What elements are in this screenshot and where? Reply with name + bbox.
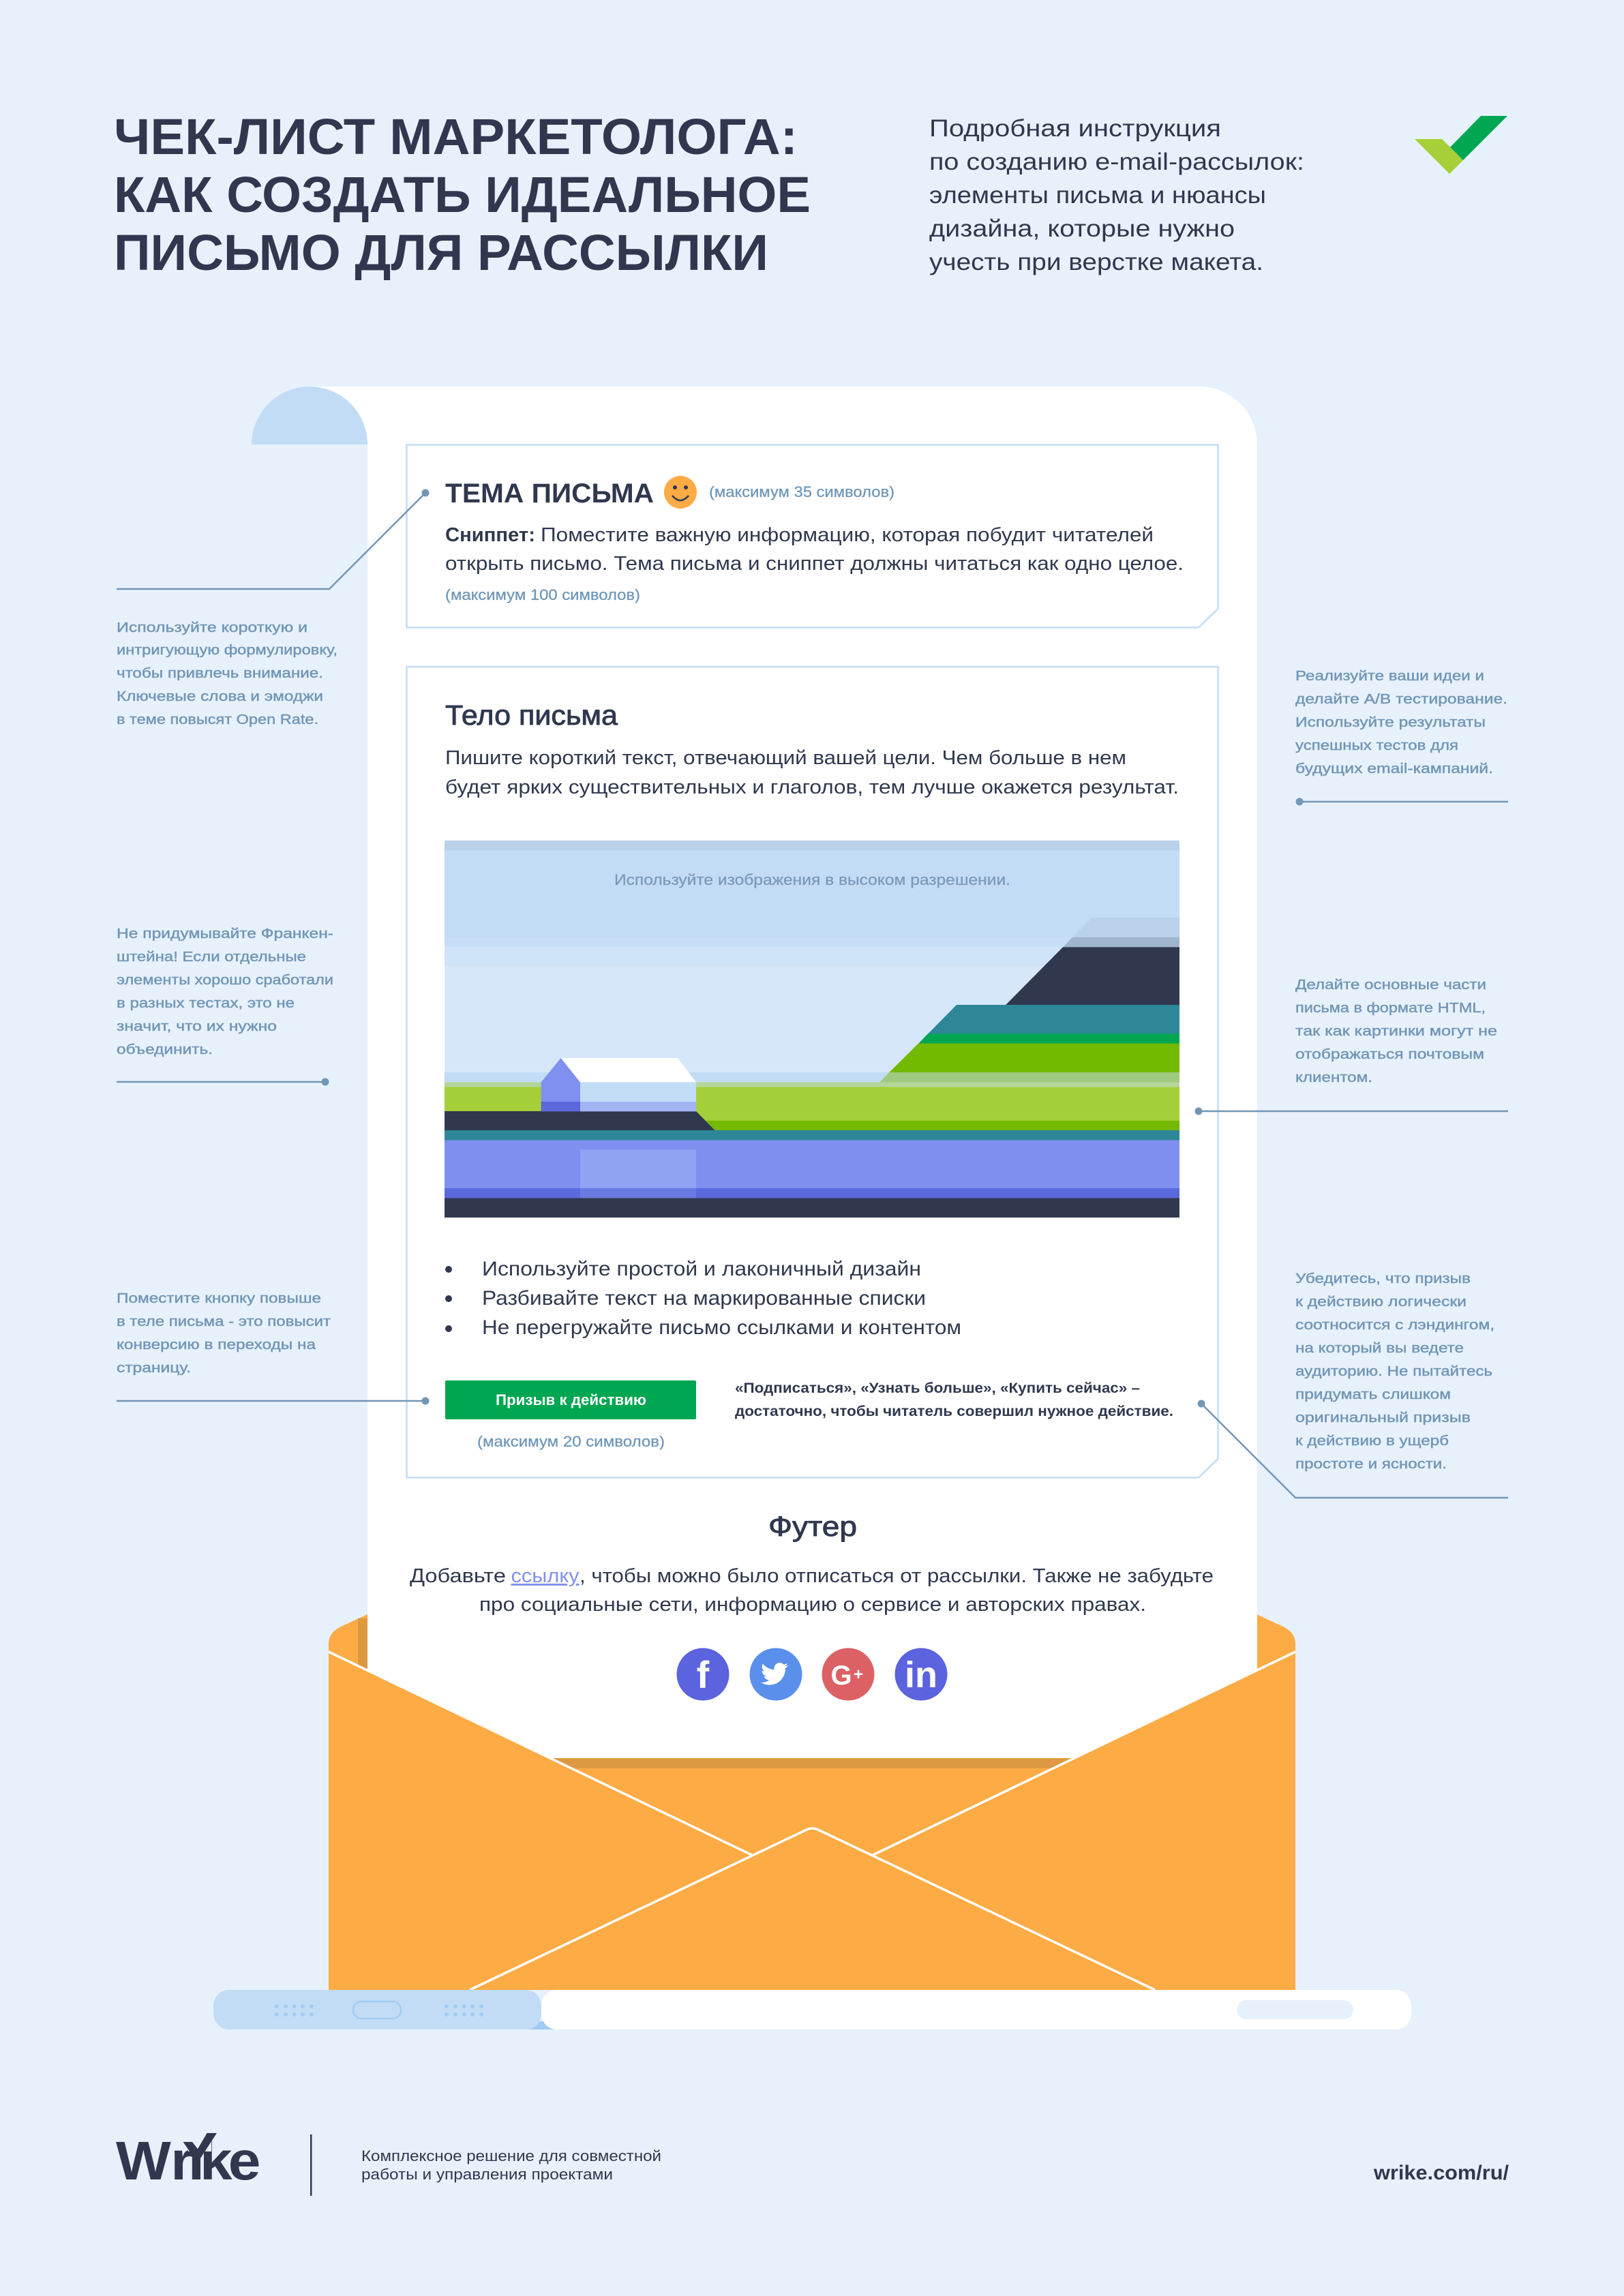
callout: landing consistency: простоте и ясности. [1295,1456,1447,1472]
callout: button position: конверсию в переходы на [117,1337,316,1353]
icon: wrike check mark [1415,116,1507,174]
phone base [213,1990,1411,2029]
house [541,1058,696,1111]
callout: landing consistency: Убедитесь, что призыв [1295,1271,1471,1286]
logo: wrike: Wrike [116,2130,260,2191]
icon: linkedin [894,1648,948,1700]
paper curl [252,387,367,444]
icon: twitter [750,1648,802,1700]
home button [353,2002,401,2019]
callout: frankenstein: элементы хорошо сработали [117,972,333,988]
callout: frankenstein [117,926,333,1085]
body text [445,747,1179,798]
envelope fold lines [329,1652,1295,1990]
callout: frankenstein: штейна! Если отдельные [117,949,306,965]
title: КАК СОЗДАТЬ ИДЕАЛЬНОЕ [114,166,811,223]
icon: linkedin: in [905,1655,937,1695]
website url: wrike.com/ru/ [1373,2162,1509,2184]
callout: ab testing: Используйте результаты [1295,714,1486,730]
icon: google plus [822,1648,874,1700]
callout: ab testing: Реализуйте ваши идеи и [1295,668,1484,684]
tagline: работы и управления проектами [361,2166,613,2183]
callout: button position: в теле письма - это повысит [117,1314,331,1329]
heading: body: Тело письма [445,699,618,731]
callout: landing consistency: к действию логически [1295,1294,1467,1310]
envelope front [329,1652,1295,1990]
callout: frankenstein: объединить. [117,1042,213,1057]
subject limit: (максимум 35 символов) [709,483,894,500]
callout: landing consistency [1197,1271,1508,1498]
callout: landing consistency: соотносится с лэндингом, [1295,1317,1494,1333]
snippet text: Сниппет: [445,524,535,546]
bullet list: Не перегружайте письмо ссылками и контентом [482,1316,961,1339]
footer text: Добавьте [410,1565,506,1587]
heading: subject: ТЕМА ПИСЬМА [445,479,654,509]
callout: ab testing [1295,668,1508,806]
callout: landing consistency: на который вы ведете [1295,1340,1464,1356]
button hint: «Подписаться», «Узнать больше», «Купить сейчас» – [735,1380,1140,1396]
footer heading: Футер [768,1511,857,1542]
subtitle: элементы письма и нюансы [929,182,1266,209]
image caption: Используйте изображения в высоком разрешении. [614,871,1010,888]
bullet list [445,1258,961,1339]
envelope back [329,1614,1295,1990]
call-to-action button [445,1380,696,1419]
speaker dots [275,2004,483,2016]
snippet text [445,524,1184,575]
footer divider [310,2134,312,2196]
illustration: landscape [445,841,1179,1218]
footer text: ссылку [511,1565,580,1587]
callout: landing consistency: аудиторию. Не пытайтесь [1295,1363,1492,1379]
screen slot [1237,2000,1353,2019]
icon: google plus: G [830,1661,852,1691]
social icons [676,1648,948,1700]
title: ПИСЬМО ДЛЯ РАССЫЛКИ [114,224,768,281]
paper sheet [252,387,1257,1758]
button limit: (максимум 20 символов) [477,1433,665,1450]
snippet text: открыть письмо. Тема письма и сниппет должны читаться как одно целое. [445,553,1184,575]
callout: subject line: интригующую формулировку, [117,642,337,658]
body text: будет ярких существительных и глаголов, тем лучше окажется результат. [445,776,1179,798]
footer text [410,1565,1214,1616]
icon: facebook [676,1648,730,1700]
icon: google plus: + [854,1665,863,1684]
button hint [735,1380,1173,1419]
callout: button position: страницу. [117,1360,191,1376]
callout: html [1194,977,1508,1115]
icon: facebook: f [697,1653,710,1696]
callout: subject line: в теме повысят Open Rate. [117,712,318,727]
tagline [361,2147,661,2183]
tagline: Комплексное решение для совместной [361,2147,661,2164]
button hint: достаточно, чтобы читатель совершил нужное действие. [735,1404,1173,1419]
callout: landing consistency: оригинальный призыв [1295,1410,1471,1425]
callout: ab testing: делайте A/B тестирование. [1295,691,1507,707]
callout: html: отображаться почтовым [1295,1046,1484,1062]
callout: ab testing: успешных тестов для [1295,738,1458,753]
callout: subject line: Используйте короткую и [117,620,307,635]
callout: frankenstein: Не придумывайте Франкен- [117,926,333,941]
snippet text: Поместите важную информацию, которая побудит читателей [541,524,1154,546]
footer text: , чтобы можно было отписаться от рассылки. Также не забудьте [580,1565,1214,1587]
icon: smiley [664,476,697,509]
panel: subject line [406,444,1218,627]
title: ЧЕК-ЛИСТ МАРКЕТОЛОГА: [114,108,798,165]
subtitle: учесть при верстке макета. [929,249,1263,275]
callout: frankenstein: значит, что их нужно [117,1018,277,1034]
callout: landing consistency: к действию в ущерб [1295,1433,1449,1449]
snippet limit: (максимум 100 символов) [445,586,640,603]
subtitle [929,115,1304,275]
callout: frankenstein: в разных тестах, это не [117,995,295,1011]
callout: button position [117,1290,430,1404]
title [114,108,811,281]
callout: ab testing: будущих email-кампаний. [1295,761,1493,776]
bullet list: Разбивайте текст на маркированные списки [482,1287,926,1310]
callout: subject line [117,489,430,727]
bullet list: Используйте простой и лаконичный дизайн [482,1258,921,1280]
body text: Пишите короткий текст, отвечающий вашей цели. Чем больше в нем [445,747,1126,769]
callout: landing consistency: придумать слишком [1295,1387,1451,1402]
callout: html: Делайте основные части [1295,977,1486,993]
callout: html: так как картинки могут не [1295,1023,1497,1039]
subtitle: Подробная инструкция [929,115,1221,142]
callout: html: письма в формате HTML, [1295,1000,1486,1016]
callout: button position: Поместите кнопку повыше [117,1290,321,1306]
callout: subject line: чтобы привлечь внимание. [117,665,323,681]
subtitle: дизайна, которые нужно [929,215,1235,242]
call-to-action button: Призыв к действию [496,1391,646,1408]
callout: html: клиентом. [1295,1070,1372,1085]
subtitle: по созданию e-mail-рассылок: [929,149,1304,175]
callout: subject line: Ключевые слова и эмоджи [117,689,323,704]
panel: email body [406,667,1218,1478]
footer text: про социальные сети, информацию о сервисе и авторских правах. [479,1594,1146,1616]
